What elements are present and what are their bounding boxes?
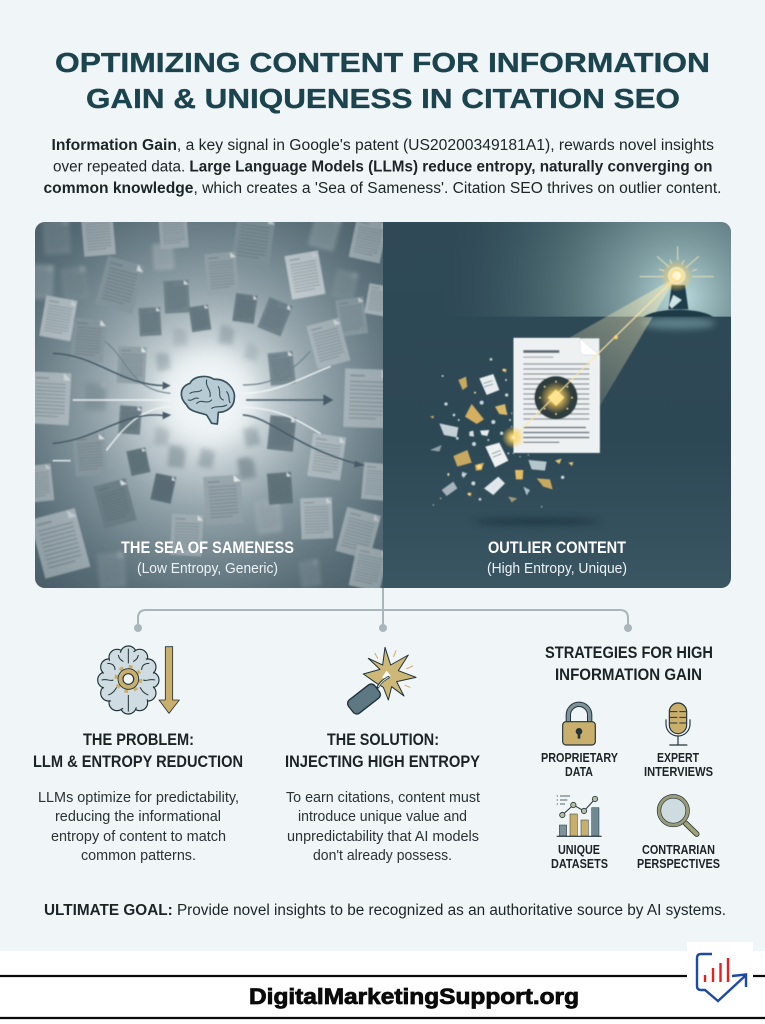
caption: the sea of sameness (121, 539, 294, 577)
icon: exploding stick (346, 647, 416, 716)
text: the problem description: reducing the informational (55, 809, 221, 825)
footer band (0, 951, 765, 1024)
vignette over documents (35, 222, 383, 588)
strategy: unique datasets (551, 796, 608, 871)
icon: lighthouse (640, 247, 713, 317)
document (514, 338, 599, 452)
glow behind brain (160, 349, 256, 445)
icon: padlock (563, 704, 595, 745)
label: contrarian perspectives: PERSPECTIVES (637, 857, 720, 871)
ultimate goal statement: ULTIMATE GOAL: Provide novel insights to be recognized as an authoritative source by AI systems. (44, 902, 726, 919)
label: expert interviews: INTERVIEWS (644, 765, 713, 779)
panel: the sea of sameness (22, 211, 392, 592)
label: contrarian perspectives (637, 843, 720, 871)
icon: magnifying glass (659, 796, 697, 834)
icon: bar chart (557, 796, 602, 836)
text: the solution description: To earn citations, content must (286, 790, 480, 806)
label: unique datasets: DATASETS (551, 857, 608, 871)
bright light ray (513, 277, 677, 437)
text: the solution description: introduce unique value and (298, 809, 467, 825)
shattered fragments (430, 358, 573, 507)
logo (687, 942, 753, 1001)
text: the solution description (286, 790, 480, 864)
caption: the sea of sameness: THE SEA OF SAMENESS (121, 539, 294, 557)
strategy: contrarian perspectives (637, 796, 720, 871)
heading: the problem (33, 731, 243, 771)
heading: the problem: LLM & ENTROPY REDUCTION (33, 753, 243, 771)
label: expert interviews: EXPERT (657, 751, 699, 765)
strategy: proprietary data (541, 704, 619, 779)
scattered documents (22, 211, 392, 592)
sky glow (492, 222, 731, 317)
title: GAIN & UNIQUENESS IN CITATION SEO (86, 83, 680, 114)
text: the problem description: common patterns. (81, 848, 196, 864)
column: the problem (33, 646, 243, 864)
heading: the solution: INJECTING HIGH ENTROPY (285, 753, 480, 771)
panel: outlier content (383, 220, 735, 588)
title: OPTIMIZING CONTENT FOR INFORMATION (55, 47, 710, 78)
shadow under document (473, 517, 600, 526)
strategy: expert interviews (644, 703, 713, 779)
heading: strategies: INFORMATION GAIN (555, 666, 702, 684)
intro paragraph: over repeated data. Large Language Models (LLMs) reduce entropy, naturally converging on (53, 158, 712, 176)
intro paragraph: common knowledge, which creates a 'Sea of Sameness'. Citation SEO thrives on outlier content. (44, 180, 722, 197)
label: proprietary data: PROPRIETARY (541, 751, 619, 765)
text: the problem description: LLMs optimize for predictability, (38, 790, 239, 806)
label: expert interviews (644, 751, 713, 779)
label: unique datasets (551, 843, 608, 871)
icon: brain with gear and down arrow (98, 646, 179, 714)
icon: microphone (666, 703, 690, 745)
caption: the sea of sameness: (Low Entropy, Generic) (137, 561, 278, 577)
text: the problem description: entropy of content to match (51, 829, 226, 845)
heading: the solution (285, 731, 480, 771)
label: unique datasets: UNIQUE (558, 843, 600, 857)
flow arrows (53, 342, 365, 467)
title (55, 47, 710, 114)
text: the solution description: don't already possess. (313, 848, 452, 864)
footer website name: DigitalMarketingSupport.org (249, 984, 579, 1009)
intro paragraph (44, 137, 722, 197)
sea reflection (642, 317, 715, 329)
light beam (570, 277, 677, 407)
column: strategies (541, 644, 720, 871)
heading: the solution: THE SOLUTION: (327, 731, 439, 749)
icon: brain (181, 376, 234, 424)
caption: outlier content: OUTLIER CONTENT (488, 539, 626, 557)
caption: outlier content: (High Entropy, Unique) (487, 561, 627, 577)
heading: the problem: THE PROBLEM: (83, 731, 194, 749)
connector lines (134, 588, 632, 632)
caption: outlier content (487, 539, 627, 577)
label: contrarian perspectives: CONTRARIAN (642, 843, 715, 857)
text: the problem description (38, 790, 239, 864)
label: proprietary data (541, 751, 619, 779)
column: the solution (285, 647, 480, 864)
intro paragraph: Information Gain, a key signal in Google's patent (US20200349181A1), rewards novel insights (52, 137, 714, 154)
panel: comparison image (22, 211, 735, 592)
heading: strategies (545, 644, 713, 684)
heading: strategies: STRATEGIES FOR HIGH (545, 644, 713, 662)
label: proprietary data: DATA (565, 765, 593, 779)
text: the solution description: unpredictability that AI models (287, 829, 479, 845)
